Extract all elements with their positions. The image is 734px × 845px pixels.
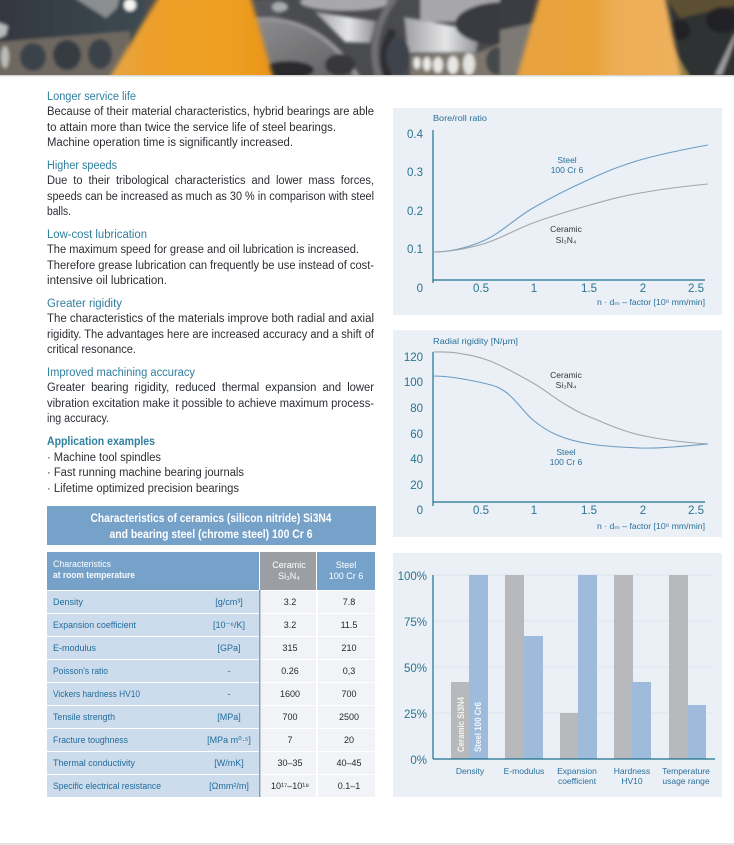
- y-axis labels: 0.4: [407, 129, 424, 141]
- row: expansion coefficient: Expansion coefficient: [53, 620, 136, 630]
- row: density: Density: [53, 597, 83, 607]
- table header row: [47, 552, 375, 590]
- row: fracture toughness: [47, 729, 375, 751]
- row: e-modulus: E-modulus: [53, 643, 97, 653]
- row: thermal conductivity: [47, 752, 375, 774]
- y-axis labels: 40: [410, 454, 423, 466]
- text block: longer service life: [47, 91, 374, 149]
- axes: [433, 575, 715, 759]
- row: fracture toughness: 20: [344, 735, 354, 745]
- row: poisson's ratio: 0,3: [343, 666, 355, 676]
- text block: greater rigidity: Greater rigidity: [47, 298, 122, 310]
- y-axis labels: 50%: [404, 663, 427, 675]
- x-axis labels: 2.5: [688, 283, 704, 295]
- label: steel: [550, 447, 583, 467]
- chart: bore/roll ratio: [393, 108, 722, 315]
- label: ceramic: Si₃N₄: [556, 380, 577, 390]
- row: specific electrical resistance: 10¹⁷–10¹⁸: [271, 781, 309, 791]
- y-axis labels: 0: [417, 283, 423, 295]
- table header row: Characteristics: [53, 559, 111, 569]
- text block: improved machining accuracy: ing accuracy.: [47, 413, 109, 425]
- row: vickers hardness: -: [228, 689, 230, 699]
- text block: greater rigidity: rigidity. The advantages here are increased accuracy and a shift of: [47, 329, 375, 341]
- table header row: Si₃N₄: [278, 571, 300, 581]
- axes: [433, 130, 705, 283]
- x-axis title: n · dₘ – factor [10⁶ mm/min]: [597, 297, 705, 307]
- x-axis labels: [473, 283, 704, 295]
- row: tensile strength: [47, 706, 375, 728]
- curve: steel: [433, 145, 708, 252]
- text block: low-cost lubrication: Therefore grease lubrication can frequently be use instead of cost-: [47, 260, 374, 272]
- row: fracture toughness: 7: [287, 735, 293, 745]
- bar label: steel: Steel 100 Cr6: [473, 702, 483, 752]
- text block: longer service life: Because of their material characteristics, hybrid bearings are able: [47, 106, 374, 118]
- row: density: 7.8: [343, 597, 355, 607]
- text block: improved machining accuracy: vibration excitation make it possible to achieve maximum process-: [47, 398, 374, 410]
- table title banner: [47, 506, 376, 545]
- text block: higher speeds: Higher speeds: [47, 160, 117, 172]
- row: vickers hardness: Vickers hardness HV10: [53, 689, 140, 699]
- text block: longer service life: to attain more than twice the service life of steel bearings.: [47, 122, 336, 134]
- bars: hardness: [614, 575, 651, 759]
- row: e-modulus: [GPa]: [217, 643, 241, 653]
- row: vickers hardness: 1600: [280, 689, 300, 699]
- x-axis labels: coefficient: [558, 776, 597, 786]
- curve: ceramic: [433, 184, 708, 252]
- row: vickers hardness: 700: [341, 689, 357, 699]
- row: density: 3.2: [284, 597, 296, 607]
- bars: expansion coefficient: [560, 575, 597, 759]
- x-axis labels: Density: [456, 766, 485, 776]
- row: expansion coefficient: 11.5: [341, 620, 357, 630]
- y-axis labels: 120: [404, 352, 423, 364]
- text block: application examples: · Lifetime optimized precision bearings: [47, 483, 239, 495]
- text block: higher speeds: balls.: [47, 206, 71, 218]
- row: poisson's ratio: [47, 660, 375, 682]
- table header row: at room temperature: [53, 570, 135, 580]
- text block: greater rigidity: critical resonance.: [47, 344, 136, 356]
- text block: application examples: Application examples: [47, 436, 155, 448]
- x-axis labels: Temperature: [662, 766, 710, 776]
- row: thermal conductivity: 40–45: [336, 758, 362, 768]
- axes: [433, 352, 705, 506]
- row: specific electrical resistance: Specific electrical resistance: [53, 781, 161, 791]
- label: ceramic: [550, 370, 583, 390]
- text block: greater rigidity: The characteristics of the materials improve both radial and axial: [47, 313, 374, 325]
- row: expansion coefficient: [10⁻⁶/K]: [213, 620, 245, 630]
- chart: material comparison bars: [393, 553, 722, 797]
- y-axis labels: 100%: [398, 571, 427, 583]
- y-axis labels: 75%: [404, 617, 427, 629]
- x-axis labels: 0.5: [473, 505, 489, 517]
- y-axis labels: 0.2: [407, 206, 423, 218]
- row: tensile strength: [MPa]: [217, 712, 241, 722]
- text block: low-cost lubrication: Low-cost lubrication: [47, 229, 147, 241]
- y-axis labels: 80: [410, 403, 423, 415]
- row: poisson's ratio: 0.26: [281, 666, 299, 676]
- x-axis labels: usage range: [662, 776, 710, 786]
- text block: higher speeds: [47, 160, 374, 218]
- x-axis labels: 2: [640, 283, 646, 295]
- photo bottom edge: [0, 75, 734, 76]
- y-axis labels: 100: [404, 377, 423, 389]
- text block: higher speeds: Due to their tribological characteristics and lower mass forces,: [47, 175, 374, 187]
- row: tensile strength: Tensile strength: [53, 712, 115, 722]
- chart title: Bore/roll ratio: [433, 113, 487, 123]
- x-axis labels: Expansion: [557, 766, 597, 776]
- x-axis labels: 1: [531, 283, 537, 295]
- y-axis labels: [407, 129, 424, 295]
- y-axis labels: 0.1: [407, 244, 423, 256]
- label: steel: 100 Cr 6: [551, 165, 584, 175]
- label: steel: Steel: [557, 155, 577, 165]
- row: thermal conductivity: [W/mK]: [214, 758, 244, 768]
- x-axis labels: 2.5: [688, 505, 704, 517]
- row: e-modulus: 210: [341, 643, 357, 653]
- text block: low-cost lubrication: [47, 229, 374, 287]
- text block: application examples: [47, 436, 244, 495]
- y-axis labels: 20: [410, 480, 423, 492]
- text block: low-cost lubrication: intensive oil lubrication.: [47, 275, 167, 287]
- row: expansion coefficient: [47, 614, 375, 636]
- row: e-modulus: 315: [282, 643, 298, 653]
- x-axis labels: 1: [531, 505, 537, 517]
- chart title: Radial rigidity [N/μm]: [433, 336, 518, 346]
- text block: application examples: · Machine tool spindles: [47, 452, 161, 464]
- label: steel: 100 Cr 6: [550, 457, 583, 467]
- y-axis labels: 60: [410, 429, 423, 441]
- y-axis labels: [404, 352, 423, 517]
- x-axis labels: Hardness: [614, 766, 650, 776]
- x-axis labels: 1.5: [581, 505, 597, 517]
- row: tensile strength: 700: [282, 712, 298, 722]
- table title banner: Characteristics of ceramics (silicon nitride) Si3N4: [90, 511, 332, 525]
- x-axis labels: [473, 505, 704, 517]
- bars: temperature usage range: [669, 575, 706, 759]
- row: density: [47, 591, 375, 613]
- header photo: bearings with orange cones: [0, 0, 734, 82]
- label: ceramic: [550, 224, 583, 245]
- row: fracture toughness: [MPa m⁰·⁵]: [207, 735, 251, 745]
- bar label: ceramic: Ceramic Si3N4: [456, 697, 466, 752]
- row: vickers hardness: [47, 683, 375, 705]
- x-axis labels: E-modulus: [504, 766, 544, 776]
- y-axis labels: 0%: [410, 755, 427, 767]
- text block: improved machining accuracy: Greater bearing rigidity, reduced thermal expansion and lower: [47, 382, 374, 394]
- row: density: [g/cm³]: [215, 597, 243, 607]
- curve: ceramic: [433, 352, 708, 444]
- row: fracture toughness: Fracture toughness: [53, 735, 128, 745]
- y-axis labels: 0: [417, 505, 423, 517]
- table header row: Ceramic: [272, 560, 306, 570]
- row: expansion coefficient: 3.2: [284, 620, 296, 630]
- text block: longer service life: Longer service life: [47, 91, 136, 103]
- row: poisson's ratio: -: [228, 666, 230, 676]
- y-axis labels: 25%: [404, 709, 427, 721]
- row: tensile strength: 2500: [339, 712, 359, 722]
- text block: higher speeds: speeds can be increased as much as 30 % in comparison with steel: [47, 191, 374, 203]
- label: steel: [551, 155, 584, 175]
- label: ceramic: Si₃N₄: [556, 235, 577, 245]
- x-axis labels: 2: [640, 505, 646, 517]
- text block: low-cost lubrication: The maximum speed for grease and oil lubrication is increased.: [47, 244, 359, 256]
- text block: improved machining accuracy: Improved machining accuracy: [47, 367, 195, 379]
- text block: application examples: · Fast running machine bearing journals: [47, 467, 244, 479]
- row: e-modulus: [47, 637, 375, 659]
- characteristics table: [47, 552, 375, 797]
- chart: radial rigidity: [393, 330, 722, 537]
- bars: e-modulus: [505, 575, 543, 759]
- table header row: Steel: [336, 560, 356, 570]
- label: ceramic: Ceramic: [550, 224, 583, 234]
- row: specific electrical resistance: [Ωmm²/m]: [209, 781, 249, 791]
- x-axis title: n · dₘ – factor [10⁶ mm/min]: [597, 521, 705, 531]
- row: thermal conductivity: 30–35: [277, 758, 303, 768]
- row: specific electrical resistance: [47, 775, 375, 797]
- row: thermal conductivity: Thermal conductivity: [53, 758, 135, 768]
- y-axis labels: 0.3: [407, 167, 423, 179]
- x-axis labels: 1.5: [581, 283, 597, 295]
- curve: steel: [433, 376, 708, 448]
- x-axis labels: 0.5: [473, 283, 489, 295]
- x-axis labels: [456, 766, 710, 786]
- text block: longer service life: Machine operation time is significantly increased.: [47, 137, 293, 149]
- table header row: 100 Cr 6: [329, 571, 363, 581]
- row: poisson's ratio: Poisson’s ratio: [53, 666, 108, 676]
- row: specific electrical resistance: 0.1–1: [338, 781, 360, 791]
- text block: greater rigidity: [47, 298, 375, 356]
- bars: density: [451, 575, 488, 759]
- x-axis labels: HV10: [621, 776, 643, 786]
- y-axis labels: [398, 571, 427, 767]
- label: ceramic: Ceramic: [550, 370, 583, 380]
- table title banner: and bearing steel (chrome steel) 100 Cr 6: [110, 527, 313, 541]
- text block: improved machining accuracy: [47, 367, 374, 425]
- label: steel: Steel: [556, 447, 576, 457]
